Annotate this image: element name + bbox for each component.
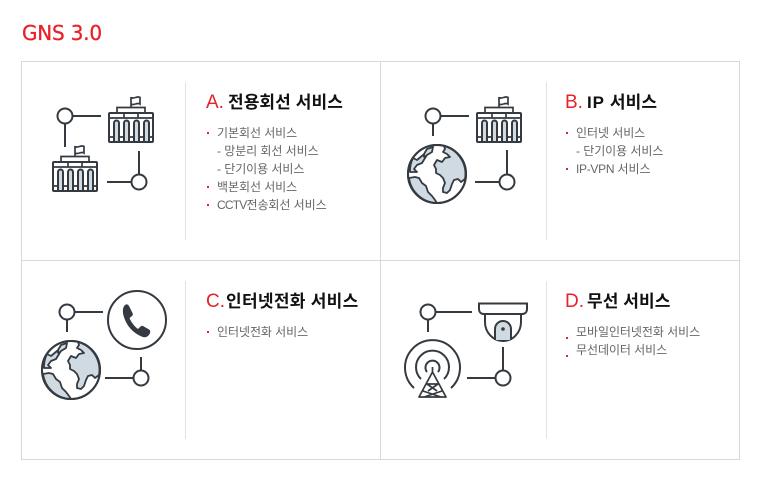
icon: dome camera [479,304,527,341]
list D: 무선데이터 서비스 [576,343,667,357]
list A: - 단기이용 서비스 [217,162,304,176]
list A [207,126,327,212]
list B: - 단기이용 서비스 [576,144,663,158]
icon group B: building and globe network [408,97,521,203]
list A: CCTV전송회선 서비스 [217,198,327,212]
heading C: C.인터넷전화 서비스 [206,291,359,312]
list D [566,325,700,357]
list C: 인터넷전화 서비스 [217,325,308,339]
title: GNS 3.0 [22,21,102,45]
list B: IP-VPN 서비스 [576,162,650,176]
grid lines [22,62,740,460]
list D: 모바일인터넷전화 서비스 [576,325,700,339]
icon group A: buildings network [53,97,153,191]
icon: radio tower [405,340,460,397]
list B [566,126,663,176]
list A: 기본회선 서비스 [217,126,297,140]
icon: phone [108,291,166,349]
heading B: B.IP 서비스 [565,92,657,113]
heading A: A.전용회선 서비스 [206,92,343,113]
icon group D: camera and tower network [405,304,527,397]
list A: 백본회선 서비스 [217,180,297,194]
heading D: D.무선 서비스 [565,291,671,312]
list B: 인터넷 서비스 [576,126,645,140]
list A: - 망분리 회선 서비스 [217,144,319,158]
icon group C: phone and globe network [42,291,166,399]
